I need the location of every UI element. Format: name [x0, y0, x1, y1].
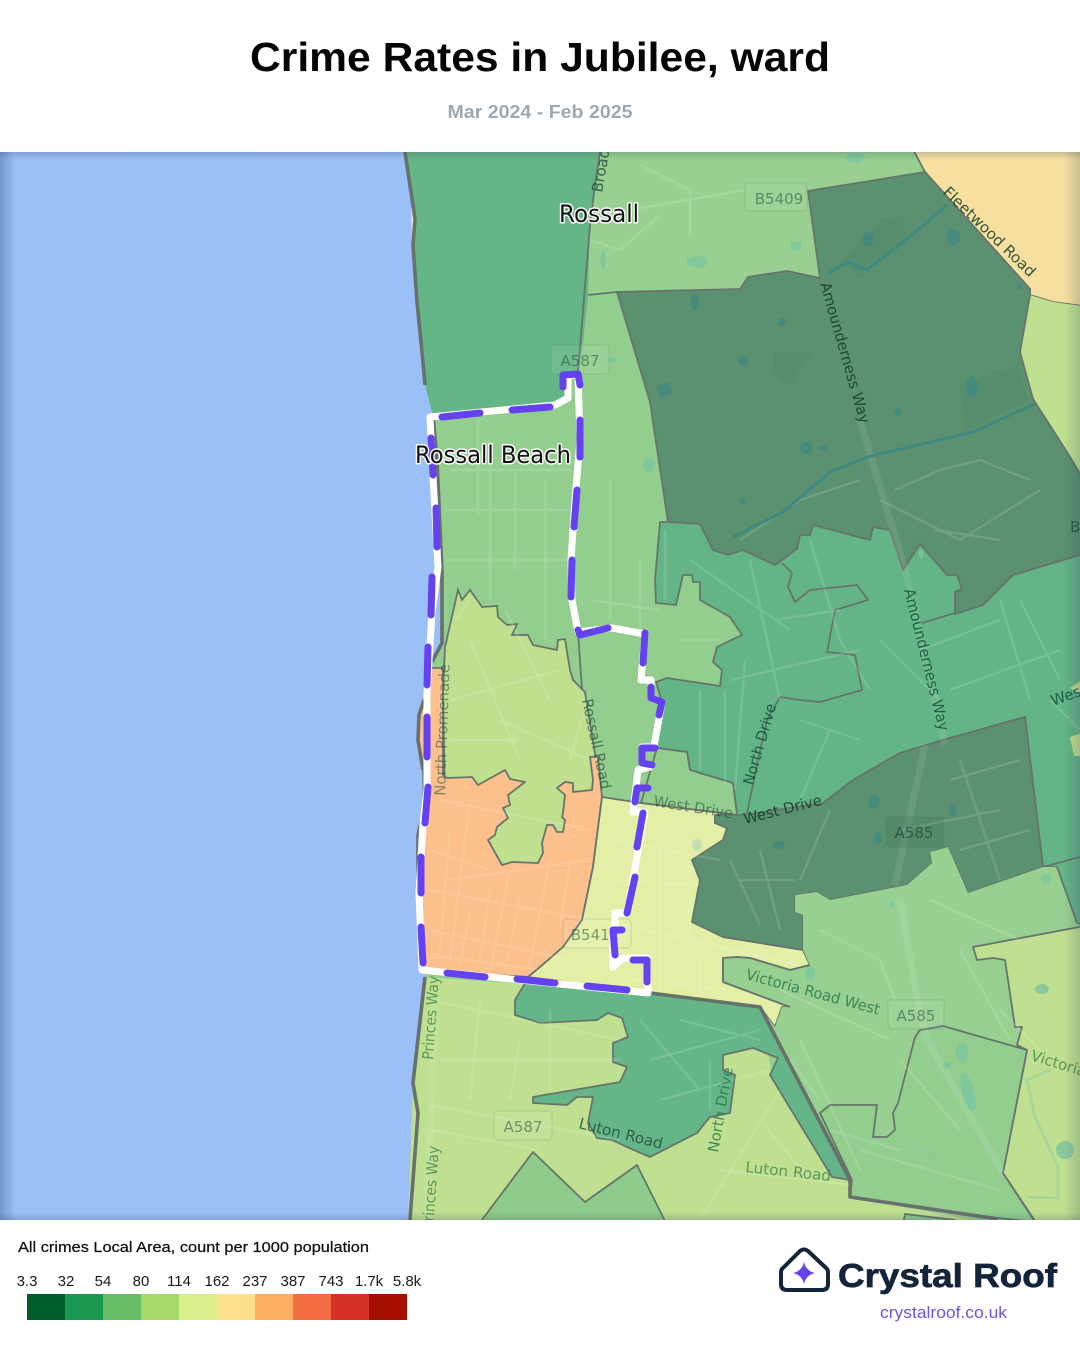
- road labels: Fleetwood Road: [939, 183, 1039, 281]
- ward boundary: Jubilee: [419, 374, 662, 993]
- date range subtitle: Mar 2024 - Feb 2025: [448, 101, 632, 122]
- zone: south-east inner: [820, 1026, 1035, 1222]
- road labels: Princes Way: [419, 1145, 443, 1230]
- road labels: Luton Road: [745, 1158, 832, 1185]
- thick boundaries and coast: [405, 152, 998, 1220]
- zone: small south green: [903, 1213, 956, 1220]
- road shields: A585: [895, 824, 933, 842]
- legend values: 237: [242, 1273, 268, 1290]
- road labels: Amounderness Way: [816, 280, 874, 426]
- road shields: A585: [897, 1007, 935, 1025]
- legend values: 387: [280, 1273, 306, 1290]
- road shields: B5409: [755, 190, 803, 208]
- road labels: North Promenade: [431, 664, 454, 796]
- ponds on light zones: [600, 153, 1074, 1159]
- zone: north-east yellow: [914, 152, 1080, 306]
- road shields: B5412: [571, 926, 619, 944]
- zone: orange high crime: [418, 668, 602, 977]
- road network: [428, 165, 1080, 1220]
- boundary lines: south-east: [723, 867, 1077, 1007]
- zone: south-east light: [724, 847, 1080, 1028]
- legend values: 32: [58, 1273, 74, 1290]
- zone: east small light patches: [1070, 680, 1080, 756]
- legend values: 54: [95, 1273, 111, 1290]
- road labels: Princes Way: [419, 975, 443, 1060]
- legend: [17, 1239, 422, 1320]
- icon: house with star: [781, 1250, 828, 1290]
- legend title: All crimes Local Area, count per 1000 population: [18, 1239, 369, 1256]
- zone: centre east green: [655, 522, 1080, 927]
- zone: far south-east lime: [973, 925, 1080, 1230]
- road labels: [419, 147, 1080, 1230]
- water features: [656, 229, 1022, 849]
- legend values: 162: [204, 1273, 230, 1290]
- road labels: Luton Road: [577, 1114, 665, 1153]
- road labels: West Drive: [742, 791, 824, 828]
- streams: [733, 205, 1058, 1198]
- road shields: [494, 183, 944, 1140]
- legend values: 114: [167, 1273, 191, 1290]
- north drive pocket boundary: [747, 563, 1080, 867]
- place label: Rossall Beach: Rossall Beach: [415, 441, 571, 469]
- wordmark: Crystal Roof: [838, 1257, 1058, 1294]
- legend values: 5.8k: [393, 1273, 422, 1290]
- legend values: 3.3: [17, 1273, 37, 1290]
- zone: pale yellow south: [528, 797, 810, 1027]
- legend values: 1.7k: [355, 1273, 384, 1290]
- zone: dark green central: [692, 717, 1043, 950]
- zone: south bottom green: [478, 1152, 667, 1225]
- legend values: 80: [133, 1273, 149, 1290]
- zone: south green: [515, 980, 850, 1180]
- zone: north-east lime: [1021, 295, 1080, 472]
- sea: [0, 152, 440, 1220]
- land base: [408, 246, 1080, 1220]
- road shields: A587: [504, 1118, 542, 1136]
- road labels: Rossall Road: [578, 697, 615, 791]
- road labels: Amounderness Way: [900, 587, 953, 733]
- road labels: Victoria Road West: [744, 965, 882, 1019]
- title: Crime Rates in Jubilee, ward: [250, 34, 830, 80]
- road shields: A587: [561, 352, 599, 370]
- logo: Crystal Roof: [781, 1250, 1058, 1322]
- map edge shading: [0, 152, 1080, 1220]
- road labels: North Drive: [740, 701, 780, 787]
- legend values: [17, 1273, 422, 1290]
- zone: Rossall west: [403, 140, 603, 416]
- legend values: 743: [318, 1273, 344, 1290]
- zone: south lime: [408, 977, 998, 1225]
- place label: Rossall: Rossall: [559, 200, 639, 228]
- website: crystalroof.co.uk: [880, 1304, 1008, 1322]
- zone: dark patches: [773, 215, 1028, 430]
- zone: Rossall north: [588, 248, 590, 292]
- zone: lime centre: [443, 590, 602, 870]
- road labels: West Drive: [652, 792, 734, 822]
- zone: dark green north: [617, 172, 1080, 614]
- beach strip: [411, 205, 414, 238]
- zone: centre light pocket: [641, 748, 737, 815]
- road labels: Broad: [588, 147, 614, 194]
- road labels: North Drive: [704, 1066, 737, 1154]
- road labels: B: [1070, 518, 1080, 536]
- legend colour scale: [27, 1294, 407, 1320]
